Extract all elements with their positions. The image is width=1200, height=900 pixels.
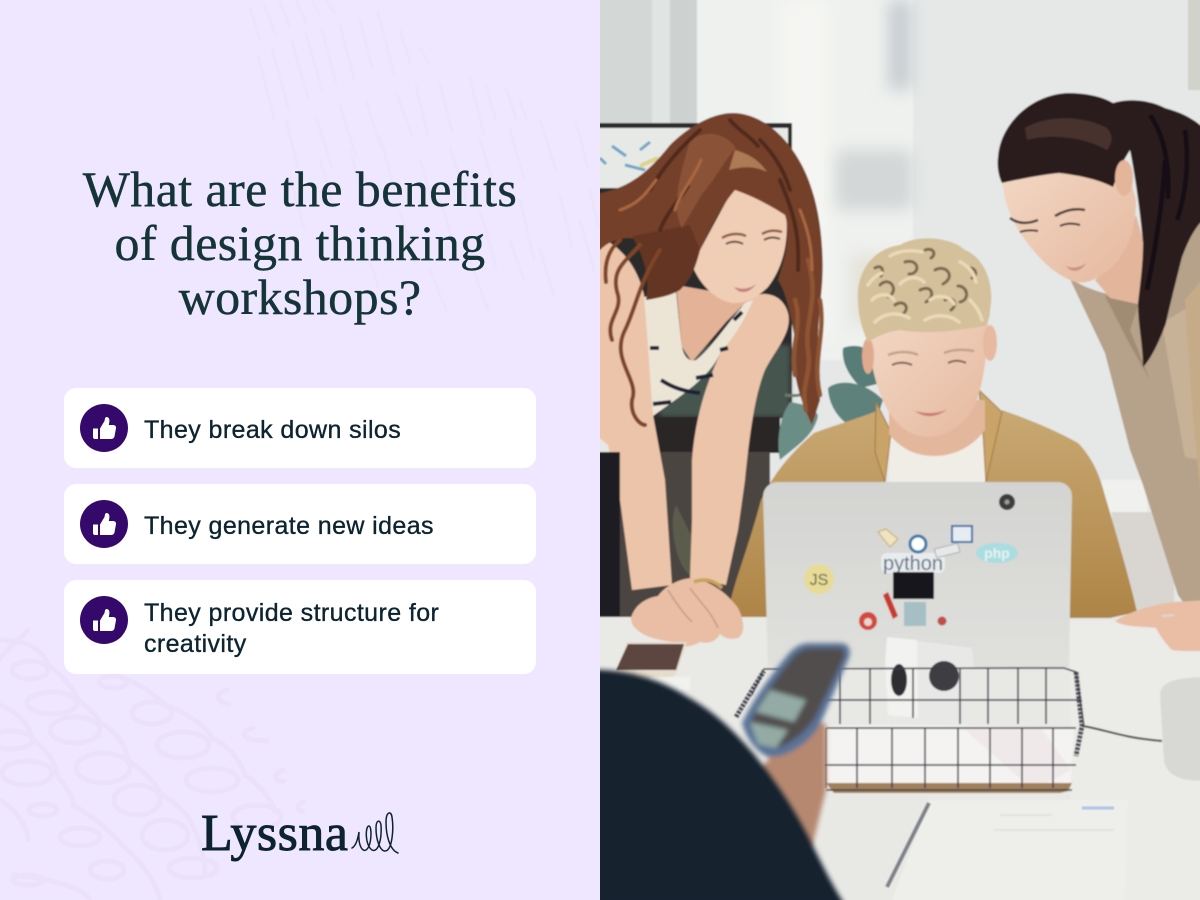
text: They provide structure for creativity <box>144 599 439 658</box>
knit top <box>644 290 753 416</box>
person: redhead woman leaning <box>590 113 823 622</box>
hands on table <box>631 578 1200 652</box>
laptop <box>763 482 1072 667</box>
neck and face <box>1095 215 1146 305</box>
text: They generate new ideas <box>144 512 434 540</box>
hair <box>590 113 823 425</box>
shoulder and arms <box>590 235 672 590</box>
stickers: JS <box>810 572 828 589</box>
hair and ponytail <box>998 93 1200 367</box>
panel: left lilac text panel <box>0 0 600 900</box>
icon: thumbs up <box>80 404 128 452</box>
foreground person, dark jumper <box>585 670 845 900</box>
text: They break down silos <box>144 416 401 444</box>
heading: main title: What are the benefits <box>83 161 517 217</box>
heading: main title: workshops? <box>179 269 421 325</box>
icon: thumbs up <box>80 500 128 548</box>
desk and chair in background <box>612 417 780 622</box>
photo: team around a laptop <box>600 0 1200 900</box>
mug <box>1160 677 1200 781</box>
card: provide structure <box>64 580 536 674</box>
logo: Lyssna wordmark: Lyssna <box>201 805 348 862</box>
monitor behind <box>590 123 792 418</box>
stickers <box>804 526 1018 630</box>
neck <box>676 285 750 362</box>
notebook <box>887 800 1128 900</box>
heading: main title: of design thinking <box>114 215 486 271</box>
person: woman with dark ponytail <box>998 93 1200 640</box>
power cube <box>885 637 975 719</box>
blazer <box>1069 200 1200 640</box>
face <box>692 185 787 303</box>
heading: main title <box>82 161 517 325</box>
neck and face <box>889 400 985 456</box>
stickers: php <box>984 545 1010 561</box>
room background <box>590 0 1200 640</box>
table top <box>590 617 1200 900</box>
stickers: python <box>883 553 943 575</box>
shirt <box>728 410 1137 618</box>
person: man with curly blond hair <box>728 238 1137 618</box>
icon: thumbs up <box>80 596 128 644</box>
hair <box>858 238 991 342</box>
phone on table <box>615 642 690 690</box>
card: break down silos <box>64 388 536 468</box>
plant <box>778 346 885 460</box>
foreground hand with phone <box>742 643 850 847</box>
wire basket <box>736 668 1162 793</box>
card: generate new ideas <box>64 484 536 564</box>
